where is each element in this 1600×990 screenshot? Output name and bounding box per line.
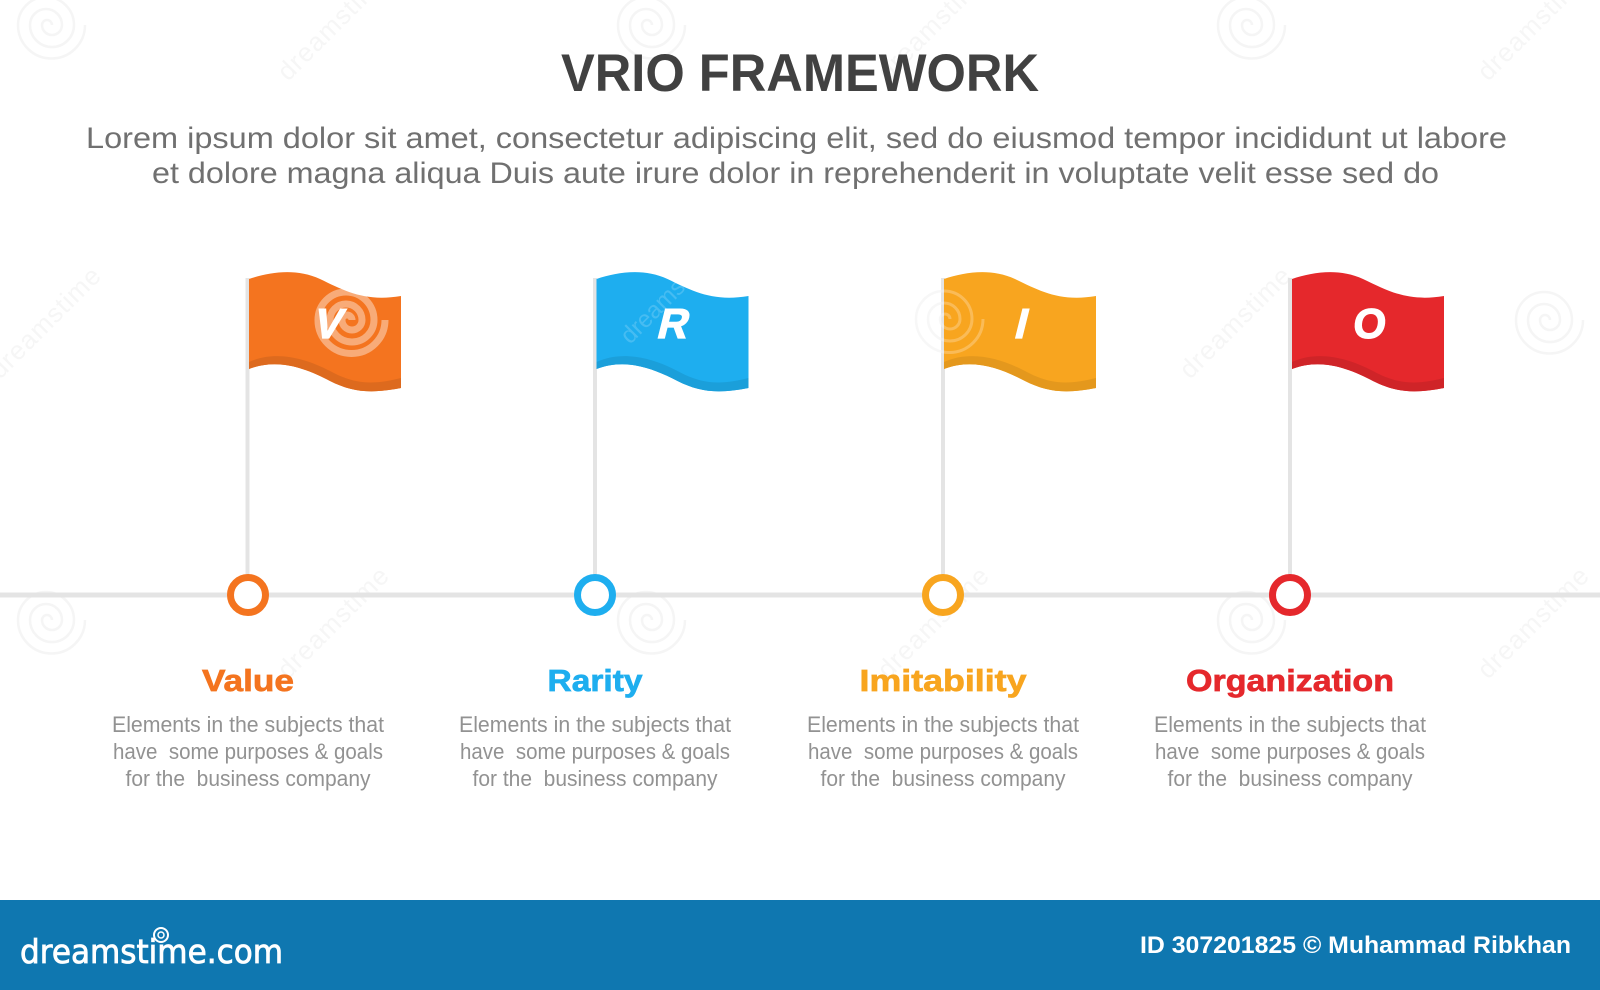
flag: R <box>596 241 748 391</box>
background watermark: dreamstime <box>1471 560 1595 684</box>
description: Organization: for the business company <box>1168 766 1412 791</box>
heading: Rarity: Rarity <box>548 663 643 698</box>
marker: Rarity <box>578 578 612 612</box>
description: Imitability: have some purposes & goals <box>808 739 1078 764</box>
flag pole: Imitability <box>941 278 945 576</box>
flag pole: Value <box>246 278 250 576</box>
description: Organization: Elements in the subjects that <box>1154 712 1426 737</box>
flag: V <box>249 272 401 391</box>
heading: Imitability: Imitability <box>860 663 1027 698</box>
marker: Organization <box>1272 578 1308 612</box>
description: Rarity: for the business company <box>472 766 718 791</box>
step: Organization <box>1154 272 1444 791</box>
background watermark: dreamstime <box>1173 260 1297 384</box>
marker: Value <box>230 578 266 612</box>
flag: R: dreamstime <box>615 241 723 349</box>
description: Value: for the business company <box>126 766 370 791</box>
step: Value <box>112 272 401 791</box>
background watermark: dreamstime <box>271 560 395 684</box>
footer logo: dreamstime.com: dreamstime.com <box>20 932 283 971</box>
flag: I: I <box>1010 301 1034 348</box>
flag: O: O <box>1351 300 1389 347</box>
flag: R: R <box>653 301 695 348</box>
flag pole: Organization <box>1288 278 1292 576</box>
flag: V: V <box>309 301 350 348</box>
subtitle: Lorem ipsum dolor sit amet, consectetur adipiscing elit, sed do eiusmod tempor incididunt ut labore <box>86 122 1507 155</box>
description: Value: Elements in the subjects that <box>112 712 384 737</box>
timeline line <box>0 592 1600 598</box>
heading: Organization: Organization <box>1186 663 1394 698</box>
subtitle: et dolore magna aliqua Duis aute irure dolor in reprehenderit in voluptate velit esse sed do <box>152 157 1439 190</box>
flag: I <box>916 272 1096 391</box>
footer credit: ID 307201825 © Muhammad Ribkhan <box>1140 932 1571 959</box>
flag pole: Rarity <box>593 278 597 576</box>
marker: Imitability <box>926 578 960 612</box>
description: Organization <box>1154 712 1426 791</box>
subtitle <box>86 122 1507 190</box>
step: Imitability <box>807 272 1096 791</box>
description: Rarity: Elements in the subjects that <box>459 712 731 737</box>
description: Value: have some purposes & goals <box>113 739 383 764</box>
description: Rarity: have some purposes & goals <box>460 739 730 764</box>
description: Value <box>112 712 384 791</box>
description: Organization: have some purposes & goals <box>1155 739 1425 764</box>
description: Imitability <box>807 712 1079 791</box>
heading: Value: Value <box>202 663 294 698</box>
description: Imitability: for the business company <box>820 766 1066 791</box>
background watermark: dreamstime <box>871 560 995 684</box>
description: Rarity <box>459 712 731 791</box>
step: Rarity <box>459 241 748 791</box>
flag: O <box>1292 272 1444 391</box>
title: VRIO FRAMEWORK <box>561 44 1039 103</box>
footer bar <box>0 900 1600 990</box>
background watermark <box>0 0 1595 684</box>
description: Imitability: Elements in the subjects that <box>807 712 1079 737</box>
